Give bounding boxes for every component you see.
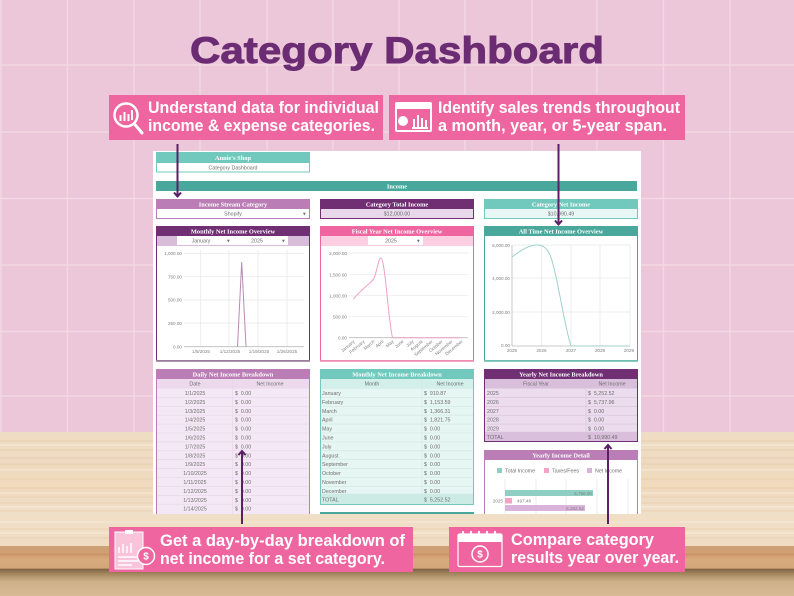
table: yearly net income breakdown: $ 0.00 [588, 409, 604, 415]
category net income card: $10,990.49 [548, 212, 574, 218]
table: daily net income breakdown [156, 369, 310, 514]
line chart: monthly net income overview: January [192, 238, 211, 244]
table: yearly net income breakdown: TOTAL [487, 435, 504, 441]
arrow: to income stream category [174, 144, 181, 196]
table: monthly net income breakdown: November [322, 480, 347, 486]
line chart: fiscal year net income overview: February [348, 338, 366, 355]
table: monthly net income breakdown: $ 0.00 [424, 462, 440, 468]
table: yearly net income breakdown: 2027 [487, 409, 499, 415]
line chart: fiscal year net income overview: September [413, 339, 434, 357]
icon: magnifier with chart [114, 104, 142, 133]
table: yearly net income breakdown [484, 369, 638, 442]
table: daily net income breakdown: $ 0.00 [235, 462, 251, 468]
callout: understand data: Understand data for individual [148, 99, 379, 117]
table: daily net income breakdown: $ 0.00 [235, 427, 251, 433]
line chart: all time net income overview: 2026 [536, 348, 547, 353]
line chart: monthly net income overview: 1,000.00 [164, 251, 182, 256]
line chart: all time net income overview: 2025 [507, 348, 518, 353]
line chart: fiscal year net income overview: Fiscal Year Net Income Overview [352, 228, 443, 236]
table: monthly net income breakdown: $ 0.00 [424, 427, 440, 433]
table: yearly net income breakdown: Fiscal Year [523, 382, 549, 388]
table: monthly net income breakdown: October [322, 471, 341, 477]
table: daily net income breakdown: 1/9/2025 [185, 462, 205, 468]
table: monthly net income breakdown: $ 910.87 [424, 391, 446, 397]
callout: identify sales trends [389, 95, 685, 140]
income section bar [156, 181, 637, 191]
table: yearly net income breakdown: Yearly Net Income Breakdown [519, 372, 603, 378]
bar chart: yearly income detail: 2025 [493, 498, 503, 504]
shop title block: Annie's Shop [215, 155, 251, 162]
table: daily net income breakdown: $ 0.00 [235, 498, 251, 504]
table: monthly net income breakdown: January [322, 391, 341, 397]
table: daily net income breakdown: $ 0.00 [235, 489, 251, 495]
table: daily net income breakdown: $ 0.00 [235, 400, 251, 406]
table: daily net income breakdown: 1/12/2025 [183, 489, 207, 495]
table: daily net income breakdown: $ 0.00 [235, 391, 251, 397]
line chart: fiscal year net income overview: May [385, 338, 395, 348]
line chart: all time net income overview: 2029 [624, 348, 635, 353]
table: monthly net income breakdown: $ 0.00 [424, 489, 440, 495]
line chart: monthly net income overview [156, 226, 310, 362]
table: daily net income breakdown: 1/2/2025 [185, 400, 205, 406]
table: monthly net income breakdown: July [322, 444, 332, 450]
income stream category selector: Income Stream Category [199, 202, 268, 208]
table: monthly net income breakdown: August [322, 453, 339, 459]
table: monthly net income breakdown: $ 0.00 [424, 436, 440, 442]
callout: compare year over year: Compare category [511, 531, 655, 549]
line chart: monthly net income overview: ▾ [282, 238, 285, 244]
title: Category Dashboard [190, 30, 604, 71]
callout: understand data [109, 95, 383, 140]
table: daily net income breakdown: Net Income [256, 382, 284, 388]
table: daily net income breakdown: 1/10/2025 [183, 471, 207, 477]
line chart: monthly net income overview: 250.00 [168, 321, 182, 326]
line chart: monthly net income overview: 500.00 [168, 298, 182, 302]
table: daily net income breakdown: 1/7/2025 [185, 444, 205, 450]
table: daily net income breakdown: 1/14/2025 [183, 507, 207, 513]
table: monthly net income breakdown: Month [365, 382, 379, 388]
table: monthly net income breakdown: $ 1,366.31 [424, 409, 451, 415]
table: daily net income breakdown: $ 0.00 [235, 444, 251, 450]
line chart: monthly net income overview: 1/19/2025 [249, 349, 270, 354]
table: daily net income breakdown: 1/3/2025 [185, 409, 205, 415]
arrow: to yearly breakdown [604, 445, 612, 524]
table: yearly net income breakdown: $ 0.00 [588, 427, 604, 433]
bar chart: yearly income detail: Net Income [595, 468, 622, 474]
icon: browser window with charts [395, 102, 432, 132]
bar chart: yearly income detail: 5,252.52 [566, 506, 584, 511]
table: monthly net income breakdown: $ 0.00 [424, 444, 440, 450]
table: monthly net income breakdown: $ 0.00 [424, 453, 440, 459]
line chart: all time net income overview: 2,000.00 [492, 310, 510, 315]
line chart: fiscal year net income overview: December [444, 339, 464, 356]
table: daily net income breakdown: $ 0.00 [235, 453, 251, 459]
line chart: monthly net income overview: Monthly Net Income Overview [191, 228, 276, 236]
table: monthly net income breakdown: December [322, 489, 347, 495]
table: daily net income breakdown: $ 0.00 [235, 471, 251, 477]
table: monthly net income breakdown: $ 1,821.75 [424, 418, 451, 424]
background: wooden shelf [0, 432, 794, 596]
bar chart: yearly income detail: Total Income [505, 468, 535, 474]
table: daily net income breakdown: 1/4/2025 [185, 418, 205, 424]
line chart: fiscal year net income overview: 2,000.00 [329, 251, 347, 256]
callout: identify sales trends: Identify sales trends throughout [438, 99, 680, 117]
line chart: fiscal year net income overview: 2025 [385, 238, 397, 244]
line chart: fiscal year net income overview: April [374, 339, 385, 349]
table: daily net income breakdown: $ 0.00 [235, 409, 251, 415]
bar chart: yearly income detail: 5,750.00 [574, 491, 592, 496]
line chart: monthly net income overview: 0.00 [173, 344, 182, 350]
line chart: fiscal year net income overview: July [405, 338, 415, 348]
line chart: monthly net income overview: 1/5/2025 [192, 349, 210, 354]
callout: identify sales trends: a month, year, or 5-year span. [438, 117, 667, 135]
category total income card: $12,000.00 [384, 212, 410, 218]
table: yearly net income breakdown: $ 5,252.52 [588, 391, 615, 397]
line chart: fiscal year net income overview: 1,500.00 [329, 272, 347, 278]
icon: calendar with coin [458, 532, 502, 566]
line chart: fiscal year net income overview: ▾ [417, 238, 420, 244]
income section bar: Income [387, 184, 407, 190]
table: yearly net income breakdown: 2025 [487, 391, 499, 397]
line chart: all time net income overview: 2028 [595, 348, 606, 353]
line chart: monthly net income overview: 1/12/2025 [220, 349, 241, 354]
table: yearly net income breakdown: $ 10,990.49 [588, 435, 618, 441]
callout: day-by-day breakdown: net income for a set category. [160, 550, 385, 568]
table: monthly net income breakdown: Net Income [436, 382, 464, 388]
callout: compare year over year [449, 527, 685, 572]
table: daily net income breakdown: $ 0.00 [235, 480, 251, 486]
callout: day-by-day breakdown [109, 527, 413, 572]
table: yearly net income breakdown: $ 0.00 [588, 418, 604, 424]
table: yearly net income breakdown: Net Income [598, 382, 626, 388]
table: monthly net income breakdown: $ 0.00 [424, 480, 440, 486]
category net income card [484, 199, 638, 219]
line chart: fiscal year net income overview: January [340, 338, 356, 353]
icon: clipboard with coin: $ [143, 552, 149, 562]
line chart: all time net income overview: All Time Net Income Overview [519, 228, 604, 236]
line chart: all time net income overview [484, 226, 638, 362]
line chart: all time net income overview: 4,000.00 [492, 276, 510, 281]
income stream category selector: ▾ [303, 212, 306, 218]
table: monthly net income breakdown: $ 1,153.59 [424, 400, 451, 406]
line chart: all time net income overview: 2027 [566, 348, 577, 353]
icon: clipboard with coin [115, 530, 154, 569]
arrow: to daily breakdown [238, 451, 246, 524]
line chart: monthly net income overview: ▾ [227, 238, 230, 244]
callout: compare year over year: results year over year. [511, 549, 679, 567]
table: monthly net income breakdown: September [322, 462, 348, 468]
table: yearly net income breakdown: 2026 [487, 400, 499, 406]
line chart: fiscal year net income overview [320, 226, 474, 362]
line chart: fiscal year net income overview: June [394, 339, 405, 349]
shop title block [156, 152, 310, 172]
table: daily net income breakdown: Date [189, 382, 201, 388]
arrow: to all time overview [555, 144, 562, 224]
table: yearly net income breakdown: 2028 [487, 418, 499, 424]
line chart: fiscal year net income overview: 1,000.00 [329, 294, 347, 298]
category net income card: Category Net Income [532, 202, 590, 208]
icon: calendar with coin: $ [477, 550, 483, 560]
line chart: monthly net income overview: 750.00 [168, 274, 182, 280]
table: daily net income breakdown: Daily Net Income Breakdown [193, 372, 274, 378]
line chart: monthly net income overview: 2025 [251, 238, 263, 244]
callout: day-by-day breakdown: Get a day-by-day breakdown of [160, 532, 405, 550]
table: monthly net income breakdown: Monthly Net Income Breakdown [352, 372, 442, 378]
table: monthly net income breakdown: TOTAL [322, 498, 339, 504]
table: daily net income breakdown: 1/1/2025 [185, 391, 205, 397]
table: daily net income breakdown: 1/11/2025 [183, 480, 207, 486]
table: monthly net income breakdown: February [322, 400, 344, 406]
table: monthly net income breakdown: April [322, 418, 333, 424]
table: daily net income breakdown: $ 0.00 [235, 507, 251, 513]
table: daily net income breakdown: 1/8/2025 [185, 453, 205, 459]
shop title block: Category Dashboard [209, 166, 257, 172]
table: monthly net income breakdown: March [322, 409, 337, 415]
bar chart: yearly income detail [484, 450, 638, 514]
category total income card [320, 199, 474, 219]
table: daily net income breakdown: 1/13/2025 [183, 498, 207, 504]
table: daily net income breakdown: 1/5/2025 [185, 427, 205, 433]
table: monthly net income breakdown [320, 369, 474, 514]
table: monthly net income breakdown: $ 0.00 [424, 471, 440, 477]
table: daily net income breakdown: $ 0.00 [235, 436, 251, 442]
line chart: fiscal year net income overview: November [434, 339, 454, 356]
table: yearly net income breakdown: 2029 [487, 427, 499, 433]
bar chart: yearly income detail: 497.48 [517, 498, 531, 504]
line chart: fiscal year net income overview: March [363, 339, 376, 351]
table: monthly net income breakdown: June [322, 436, 334, 442]
line chart: all time net income overview: 6,000.00 [492, 243, 510, 248]
line chart: monthly net income overview: 1/26/2025 [277, 349, 298, 354]
line chart: fiscal year net income overview: August [409, 338, 424, 352]
table: monthly net income breakdown: $ 5,252.52 [424, 498, 451, 504]
line chart: fiscal year net income overview: 500.00 [333, 314, 347, 320]
line chart: fiscal year net income overview: October [428, 339, 444, 353]
category total income card: Category Total Income [366, 202, 428, 208]
bar chart: yearly income detail: Yearly Income Detail [532, 452, 590, 460]
table: daily net income breakdown: 1/6/2025 [185, 436, 205, 442]
table: daily net income breakdown: $ 0.00 [235, 418, 251, 424]
line chart: all time net income overview: 0.00 [501, 343, 510, 348]
bar chart: yearly income detail: Taxes/Fees [552, 468, 579, 474]
income stream category selector: Shopify [224, 212, 242, 218]
table: yearly net income breakdown: $ 5,737.96 [588, 400, 615, 406]
line chart: fiscal year net income overview: 0.00 [338, 336, 347, 340]
table: monthly net income breakdown: May [322, 427, 332, 433]
income stream category selector [156, 199, 310, 219]
dashboard sheet [153, 151, 641, 514]
callout: understand data: income & expense categories. [148, 117, 375, 135]
